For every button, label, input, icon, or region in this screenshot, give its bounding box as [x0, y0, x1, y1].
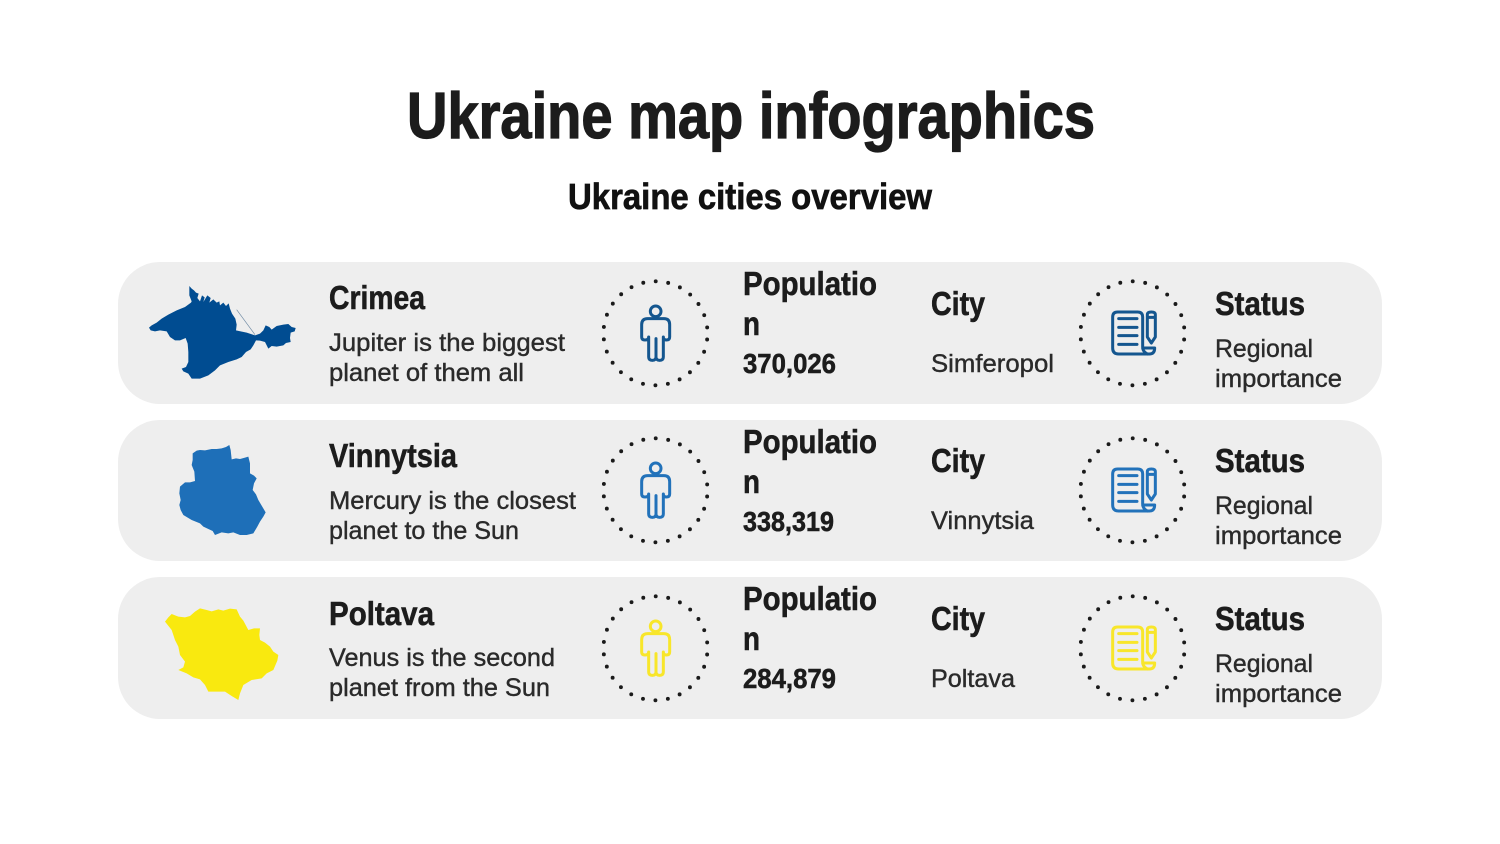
status: Status: [1215, 442, 1305, 479]
status: Regional: [1215, 650, 1313, 678]
text: Poltava description: Venus is the second: [329, 644, 555, 672]
population: 338,319: [743, 506, 834, 537]
map: Vinnytsia: [179, 445, 266, 535]
text: Vinnytsia description: Mercury is the closest: [329, 487, 576, 515]
heading: Poltava: Poltava: [329, 595, 435, 632]
population: Populatio: [743, 580, 877, 617]
city: [931, 442, 1034, 535]
text: Poltava description: [329, 644, 555, 702]
population: [743, 423, 877, 537]
population: 370,026: [743, 348, 836, 379]
status: [1215, 442, 1342, 550]
text: Vinnytsia description: [329, 487, 576, 545]
panel: Crimea: [118, 262, 1382, 404]
status: Regional: [1215, 492, 1313, 520]
status: Regional: [1215, 335, 1313, 363]
status: [1215, 600, 1342, 708]
text: Poltava description: planet from the Sun: [329, 674, 550, 702]
city: [931, 285, 1054, 378]
status: Status: [1215, 285, 1305, 322]
status: [1215, 285, 1342, 393]
city: City: [931, 442, 986, 479]
population: [743, 265, 877, 379]
population: Populatio: [743, 423, 877, 460]
map: Poltava: [165, 608, 278, 700]
population: n: [743, 620, 760, 657]
heading: Vinnytsia: Vinnytsia: [329, 437, 458, 474]
city: Poltava: [931, 665, 1015, 693]
map: Crimea: [149, 286, 296, 379]
city: City: [931, 285, 986, 322]
icon: document: [1080, 438, 1184, 542]
population: n: [743, 305, 760, 342]
population: 284,879: [743, 663, 836, 694]
subtitle: Ukraine cities overview: [568, 176, 933, 217]
status: importance: [1215, 522, 1342, 550]
text: Crimea description: planet of them all: [329, 359, 524, 387]
population: [743, 580, 877, 694]
text: Crimea description: Jupiter is the biggest: [329, 329, 565, 357]
text: Vinnytsia description: planet to the Sun: [329, 517, 519, 545]
city: City: [931, 600, 986, 637]
status: Status: [1215, 600, 1305, 637]
city: Vinnytsia: [931, 507, 1034, 535]
population: n: [743, 463, 760, 500]
text: Crimea description: [329, 329, 565, 387]
city: [931, 600, 1015, 693]
icon: person: [604, 596, 708, 700]
status: importance: [1215, 680, 1342, 708]
panel: Vinnytsia: [118, 420, 1382, 561]
heading: Crimea: Crimea: [329, 279, 426, 316]
panel: Poltava: [118, 577, 1382, 719]
icon: document: [1080, 281, 1184, 385]
city: Simferopol: [931, 350, 1054, 378]
icon: person: [604, 438, 708, 542]
status: importance: [1215, 365, 1342, 393]
population: Populatio: [743, 265, 877, 302]
icon: person: [604, 281, 708, 385]
title: Ukraine map infographics: [407, 79, 1095, 152]
icon: document: [1080, 596, 1184, 700]
